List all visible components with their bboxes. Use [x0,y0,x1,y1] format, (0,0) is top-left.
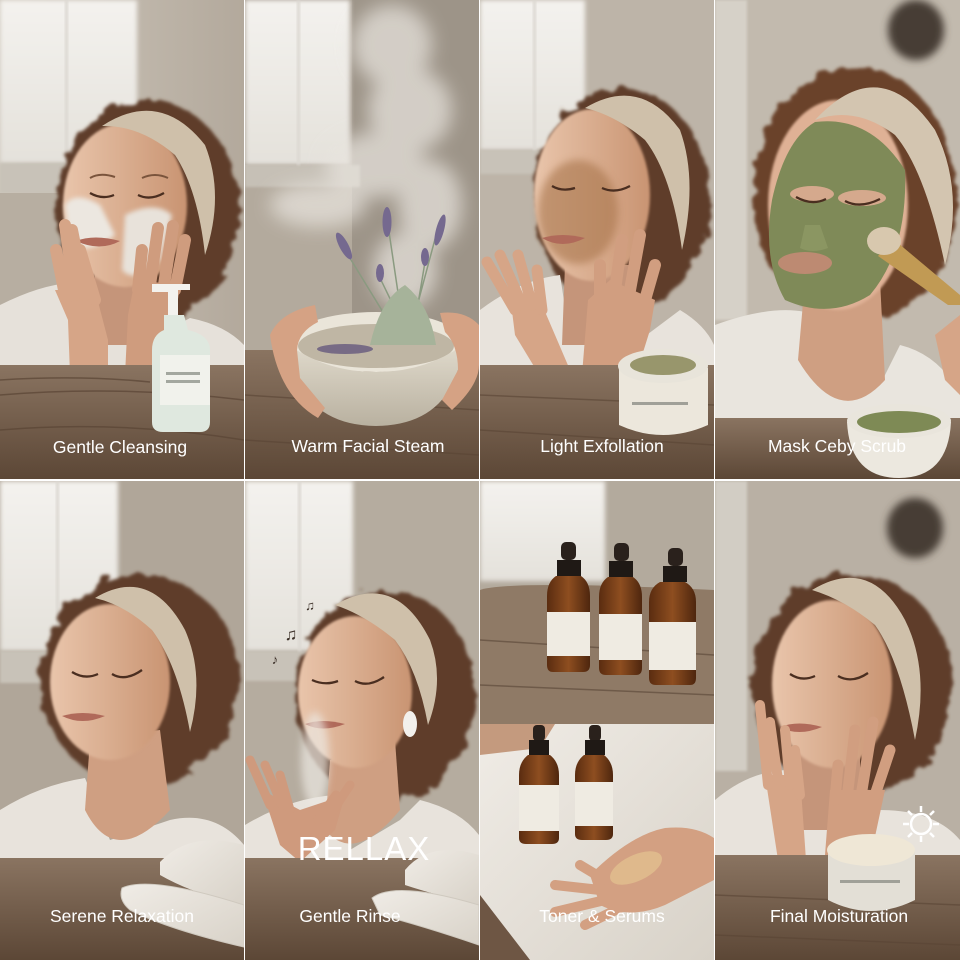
panel: light exfoliation [480,0,714,479]
caption: Gentle Rinse [299,906,401,926]
icon: pump bottle [152,284,210,432]
icon: sun [903,806,939,842]
caption: Serene Relaxation [50,906,194,926]
icon: jar [618,349,708,435]
towel scene [480,724,714,960]
icon: left hand [55,225,108,375]
icon: music notes: ♫ [285,625,297,644]
icon: left hand [487,255,570,370]
caption: Toner & Serums [539,906,665,926]
table [715,855,960,960]
icon: hands [246,756,330,858]
icon: cream jar [827,834,915,911]
panel: gentle rinse [245,481,479,960]
icon: right hand [125,226,185,375]
icon: mask bowl [847,404,951,478]
icon: music notes: ♫ [305,598,315,613]
table [480,365,714,479]
icon: music notes: ♪ [272,652,278,667]
caption: Mask Ceby Scrub [768,436,906,456]
panel: final moisturation [715,481,960,960]
icon: right hand [825,722,890,860]
water splash [301,712,329,808]
icon: open hand [555,827,714,925]
table [245,350,479,479]
panel: serene relaxation [0,481,244,960]
icon: music notes [272,602,314,664]
caption: Warm Facial Steam [292,436,444,456]
icon: lavender [317,207,448,354]
icon: towels [120,854,244,948]
icon: right hand [582,235,655,378]
panel: toner and serums [480,481,714,960]
table [715,418,960,479]
panel: gentle cleansing [0,0,244,479]
table [245,858,479,960]
label: RELLAX: RELLAX [298,830,430,867]
caption: Gentle Cleansing [53,437,187,457]
steam [270,5,462,308]
table [0,858,244,960]
icon: left hand [760,705,806,860]
panel: mask [715,0,960,479]
icon: bowl with lavender and hands [270,207,479,426]
caption: Final Moisturation [770,906,908,926]
icon: brush [867,227,960,305]
icon: towels [372,850,479,945]
table [0,365,244,479]
panel: warm facial steam [245,0,479,479]
icon: two serum bottles [519,725,613,844]
icon: serum bottles [547,542,696,685]
caption: Light Exfollation [540,436,664,456]
